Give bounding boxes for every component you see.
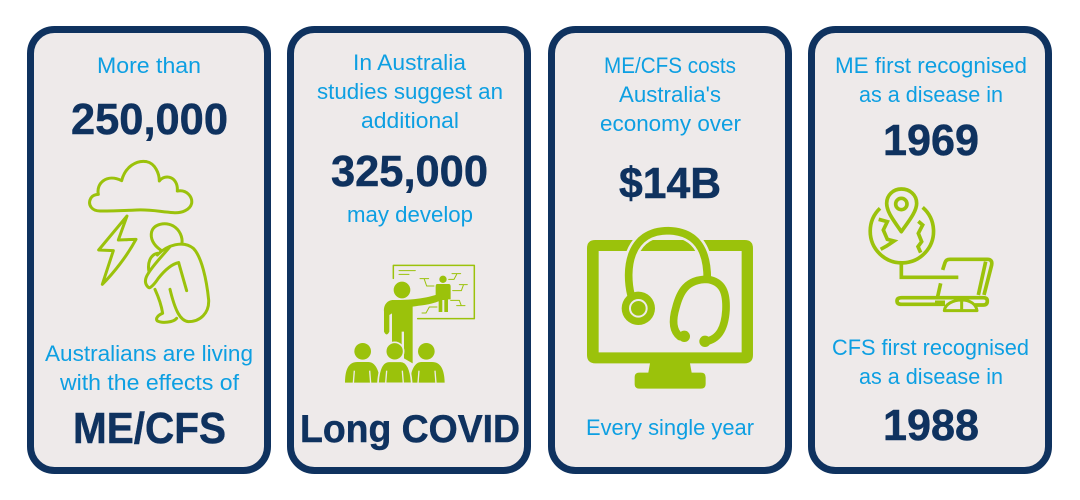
text: more than: More than: [97, 53, 201, 78]
number: 325,000: 325,000: [331, 147, 488, 196]
text: CFS first recognised as a disease in: CFS first recognised: [832, 335, 1029, 360]
text: ME/CFS costs Australia's economy over: ME/CFS costs: [604, 53, 736, 78]
panel: ME/CFS prevalence: [30, 30, 268, 470]
icon: person under storm cloud: [90, 161, 209, 322]
icon: monitor with stethoscope: [587, 231, 753, 389]
number: 250,000: 250,000: [71, 95, 228, 144]
heading: ME/CFS: ME/CFS: [73, 404, 226, 453]
panel: first recognised dates: [812, 30, 1048, 470]
text: ME/CFS costs Australia's economy over: economy over: [600, 111, 741, 136]
text: in Australia studies suggest an additional: studies suggest an: [317, 79, 503, 104]
text: ME/CFS costs Australia's economy over: Australia's: [619, 82, 721, 107]
number: $14B: $14B: [619, 159, 721, 208]
number: 1969: 1969: [883, 116, 979, 165]
panel: economic cost: [552, 30, 788, 470]
text: CFS first recognised as a disease in: as a disease in: [859, 364, 1003, 389]
text: every single year: Every single year: [586, 415, 754, 440]
text: Australians are living with the effects of: with the effects of: [59, 370, 240, 395]
text: Australians are living with the effects of: [45, 341, 253, 395]
text: ME first recognised as a disease in: as a disease in: [859, 82, 1003, 107]
text: may develop: may develop: [347, 202, 473, 227]
text: in Australia studies suggest an additional: [317, 50, 503, 133]
text: ME first recognised as a disease in: ME first recognised: [835, 53, 1027, 78]
icon: presenter with audience: [345, 265, 474, 383]
text: ME first recognised as a disease in: [835, 53, 1027, 107]
text: CFS first recognised as a disease in: [832, 335, 1029, 389]
heading: Long COVID: Long COVID: [300, 408, 520, 451]
text: Australians are living with the effects of: Australians are living: [45, 341, 253, 366]
text: ME/CFS costs Australia's economy over: [600, 53, 741, 136]
text: in Australia studies suggest an additional: additional: [361, 108, 459, 133]
text: in Australia studies suggest an additional: In Australia: [353, 50, 467, 75]
icon: globe with location pin and laptop: [870, 189, 992, 311]
number: 1988: 1988: [883, 401, 979, 450]
panel: Long COVID: [290, 30, 528, 470]
